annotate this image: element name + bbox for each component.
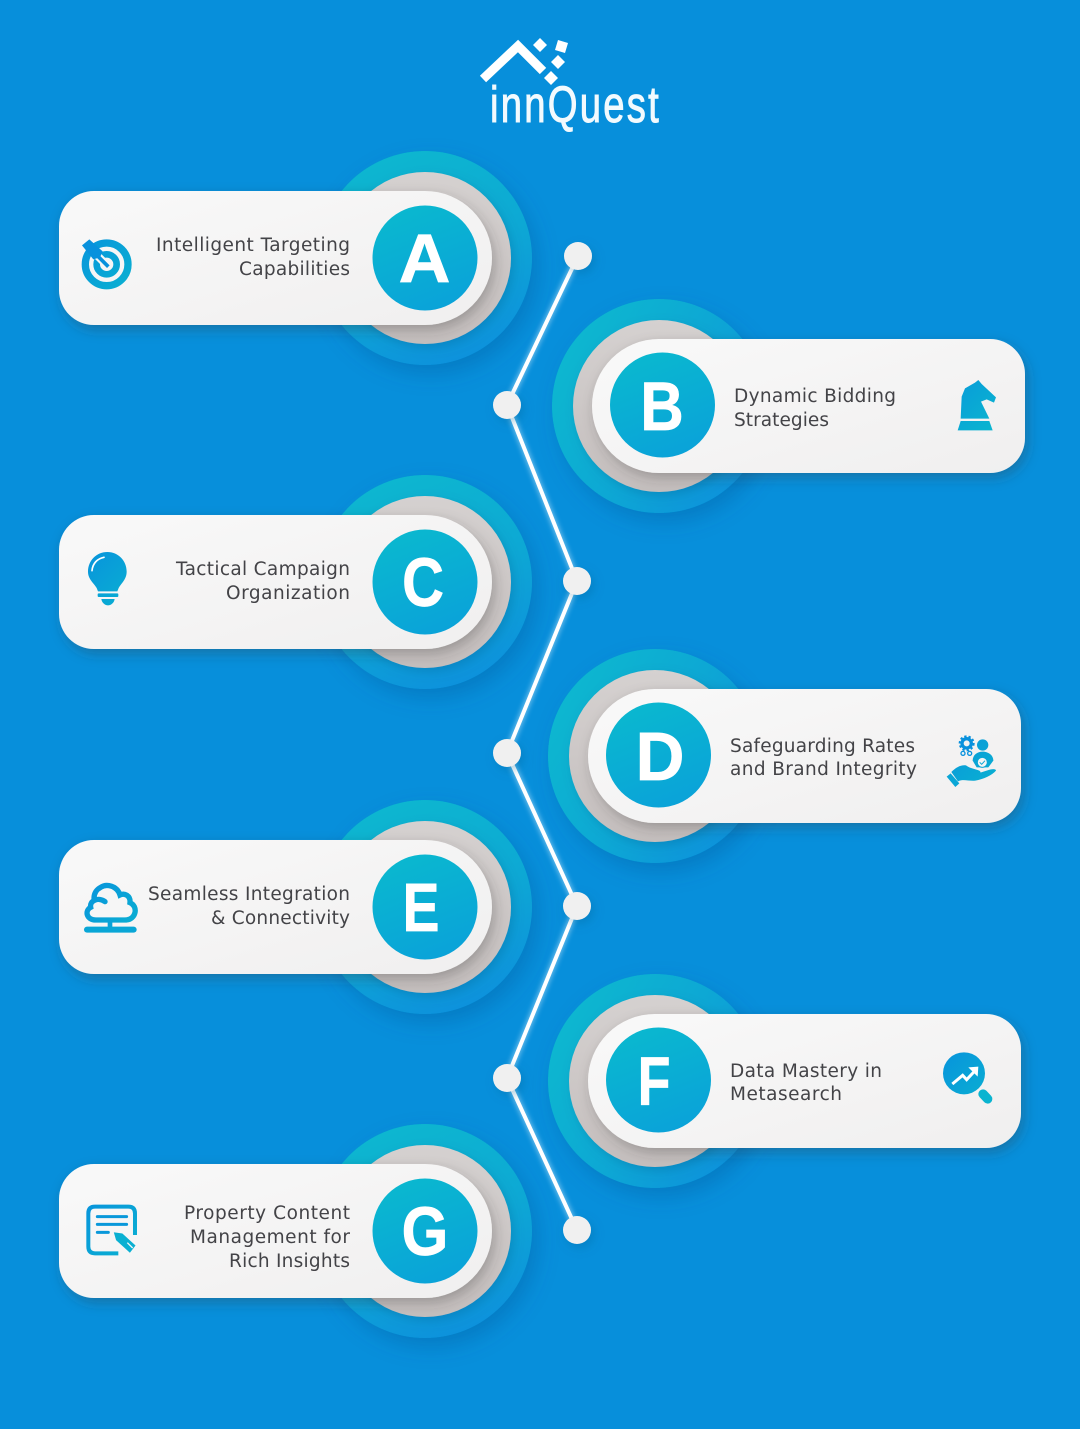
letter G: G <box>402 1192 448 1270</box>
logo roof mark <box>483 38 568 85</box>
panel F: Data Mastery in Metasearch <box>548 974 1021 1188</box>
icon: light bulb <box>88 552 127 605</box>
panel G: Property Content Management for Rich Insights <box>59 1124 532 1338</box>
text D: Safeguarding Rates <box>730 736 915 757</box>
logo wordmark: innQuest <box>490 76 661 133</box>
letter C: C <box>402 543 444 621</box>
text C: Tactical Campaign <box>175 559 350 580</box>
text G: Management for <box>190 1227 350 1248</box>
icon: magnifier with trend <box>943 1052 988 1099</box>
letter A: A <box>399 219 450 297</box>
icon: cloud network <box>84 886 137 933</box>
text A: Intelligent Targeting <box>156 235 350 256</box>
letter E: E <box>403 869 439 946</box>
text G: Rich Insights <box>229 1251 350 1272</box>
letter B: B <box>640 367 684 445</box>
icon: document with pen <box>88 1207 137 1254</box>
icon: hand with gear and person <box>947 736 996 787</box>
panel E: Seamless Integration & Connectivity <box>59 800 532 1014</box>
text B: Dynamic Bidding <box>734 386 896 407</box>
text A: Capabilities <box>239 259 350 280</box>
icon: target <box>82 239 128 286</box>
text F: Data Mastery in <box>730 1061 882 1082</box>
letter F: F <box>638 1044 670 1121</box>
text E: & Connectivity <box>211 908 350 929</box>
panel A: Intelligent Targeting Capabilities <box>59 151 532 365</box>
text D: and Brand Integrity <box>730 759 917 780</box>
connector path with nodes <box>493 242 592 1244</box>
text E: Seamless Integration <box>148 884 350 905</box>
panel D: Safeguarding Rates and Brand Integrity <box>548 649 1021 863</box>
text B: Strategies <box>734 410 829 431</box>
text G: Property Content <box>184 1203 350 1224</box>
panel C: Tactical Campaign Organization <box>59 475 532 689</box>
icon: chess knight <box>958 380 996 430</box>
panel B: Dynamic Bidding Strategies <box>552 299 1025 513</box>
text C: Organization <box>226 583 350 604</box>
letter D: D <box>636 718 684 795</box>
text F: Metasearch <box>730 1084 842 1105</box>
logo: innQuest <box>483 38 661 133</box>
